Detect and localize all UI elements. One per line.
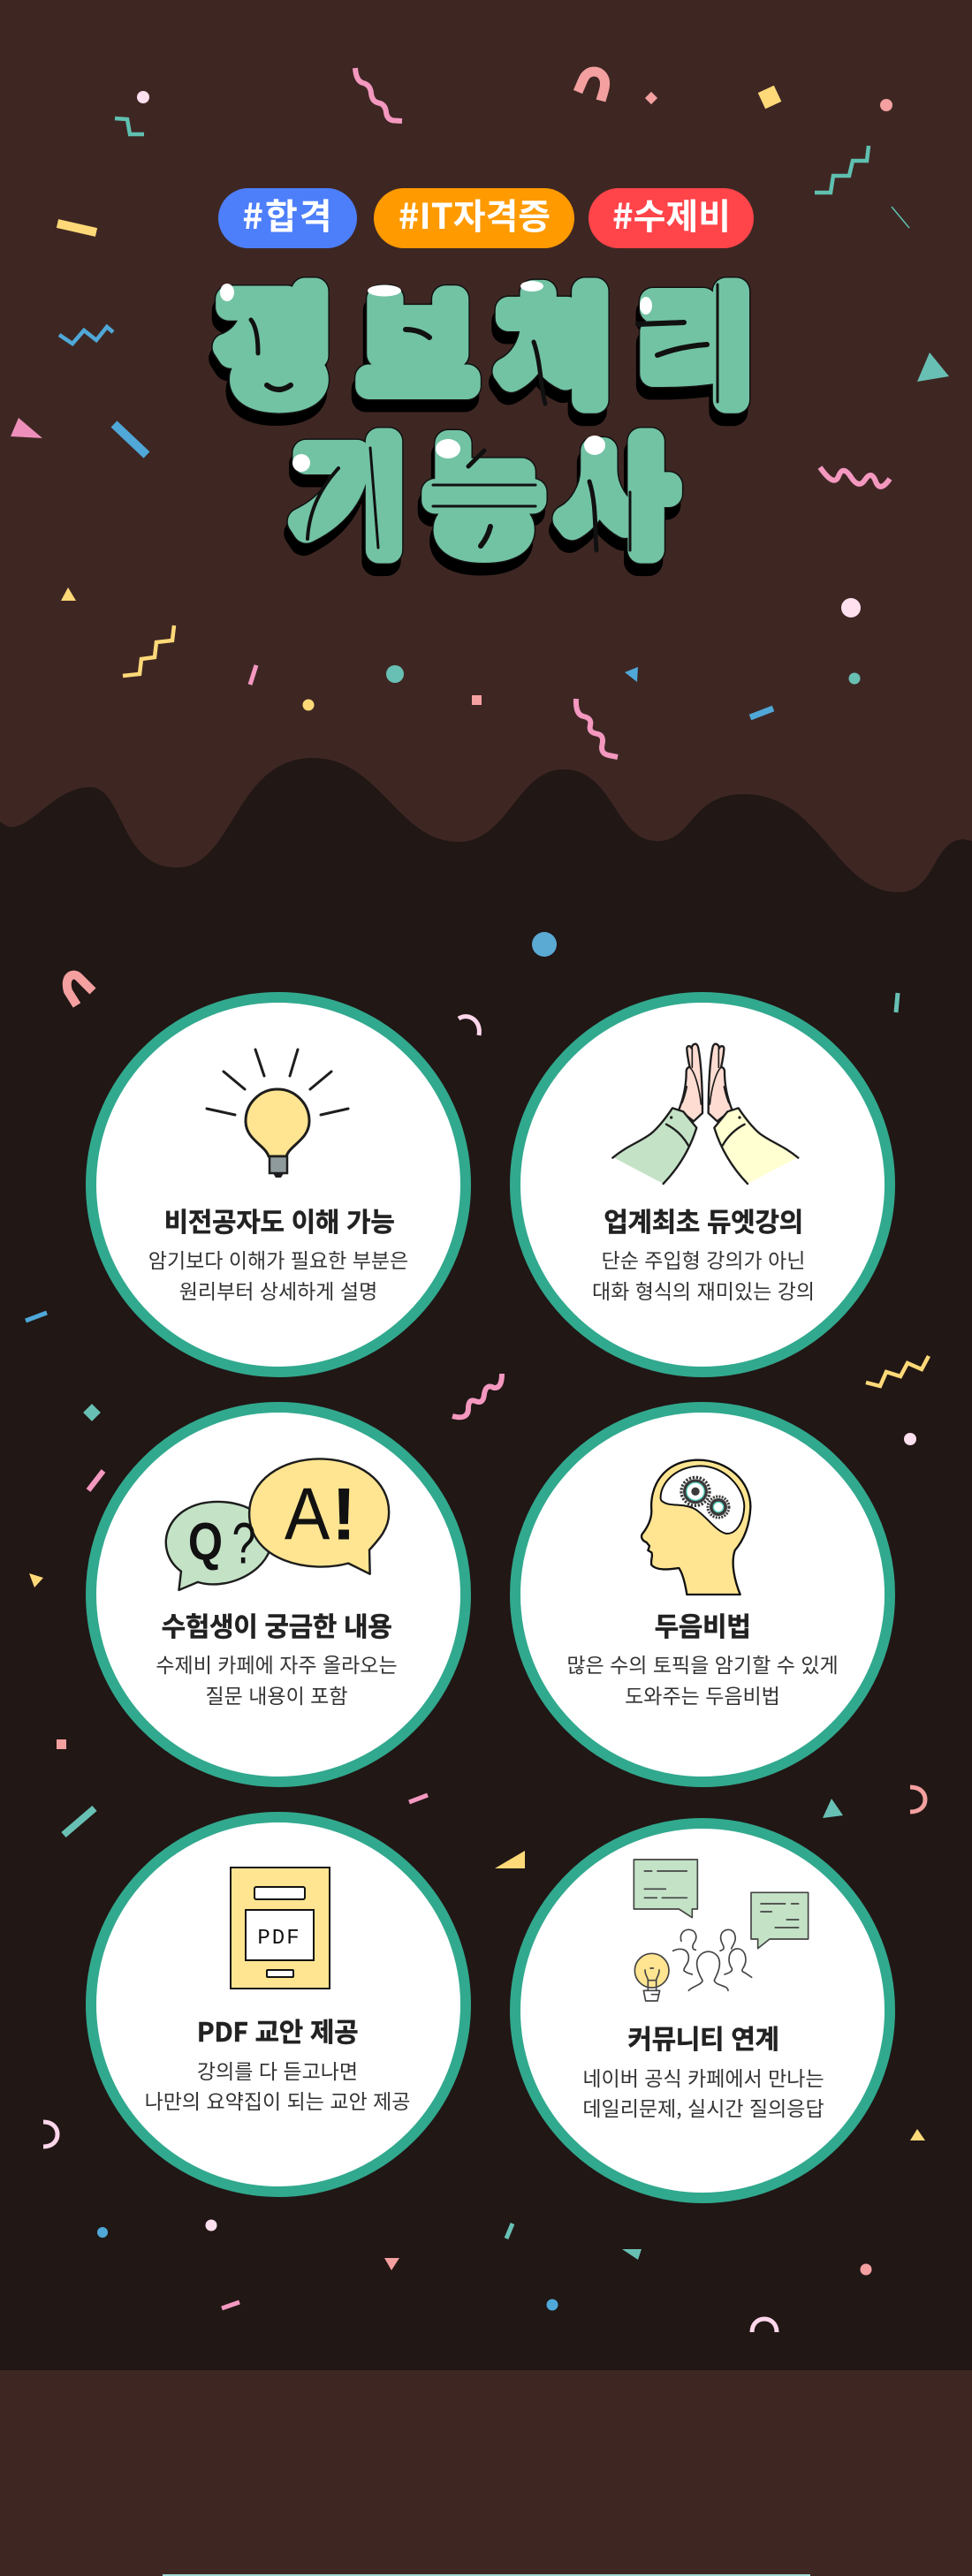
icon: Q and A speech bubbles: ? xyxy=(232,1511,255,1576)
top brown background with wave xyxy=(0,0,972,892)
icon: high five hands xyxy=(612,1044,798,1184)
confetti: top section xyxy=(11,68,949,757)
icon: Q and A speech bubbles: ! xyxy=(331,1473,356,1555)
text block xyxy=(566,1648,839,1709)
title: 정보처리 xyxy=(216,263,749,437)
title: 정보처리 xyxy=(219,252,752,426)
text block: 나만의 요약집이 되는 교안 제공 xyxy=(145,2085,410,2115)
title: 정보처리 xyxy=(219,252,752,426)
text block: 네이버 공식 카페에서 만나는 xyxy=(582,2062,824,2092)
text block xyxy=(592,1244,815,1305)
text block: 수제비 카페에 자주 올라오는 xyxy=(156,1648,398,1678)
pill: 수제비: #수제비 xyxy=(612,188,731,239)
bottom brown band xyxy=(0,2370,972,2576)
heading: 업계최초 듀엣강의 xyxy=(604,1201,803,1239)
text block: 강의를 다 듣고나면 xyxy=(197,2055,358,2085)
pill: IT자격증: #IT자격증 xyxy=(399,188,551,239)
panel: 커뮤니티 연계 xyxy=(515,1823,890,2198)
title: 기능사 xyxy=(293,402,672,576)
title: 기능사 xyxy=(291,413,670,587)
bottom line xyxy=(163,2574,810,2576)
icon: PDF document: PDF xyxy=(257,1927,301,1951)
heading: 커뮤니티 연계 xyxy=(627,2018,779,2057)
heading: 두음비법 xyxy=(655,1605,750,1644)
title: 기능사 xyxy=(293,402,672,576)
text block xyxy=(156,1648,398,1709)
text block: 많은 수의 토픽을 암기할 수 있게 xyxy=(566,1648,839,1678)
text block xyxy=(582,2062,824,2122)
tag pills xyxy=(218,188,754,248)
text block: 암기보다 이해가 필요한 부분은 xyxy=(148,1244,408,1274)
title xyxy=(216,252,752,587)
heading: PDF 교안 제공 xyxy=(197,2011,358,2049)
text block: 질문 내용이 포함 xyxy=(205,1679,348,1709)
text block: 도와주는 두음비법 xyxy=(625,1679,780,1709)
confetti: middle and lower section xyxy=(26,932,929,2332)
text block xyxy=(148,1244,408,1305)
text block: 원리부터 상세하게 설명 xyxy=(179,1275,377,1305)
icon: Q and A speech bubbles: Q xyxy=(188,1512,223,1571)
icon: PDF document xyxy=(231,1868,330,1989)
pill: 수제비 xyxy=(589,188,754,248)
text block: 대화 형식의 재미있는 강의 xyxy=(592,1275,815,1305)
heading: 비전공자도 이해 가능 xyxy=(164,1201,394,1239)
pill: IT자격증 xyxy=(374,188,574,248)
text block: 단순 주입형 강의가 아닌 xyxy=(602,1244,805,1274)
panel: 두음비법 xyxy=(515,1407,890,1782)
text block: 데일리문제, 실시간 질의응답 xyxy=(582,2092,824,2122)
pill: 합격 xyxy=(218,188,357,248)
text block xyxy=(145,2055,410,2115)
pill: 합격: #합격 xyxy=(242,188,334,239)
panel: 업계최초 듀엣강의 xyxy=(515,997,890,1372)
panel: PDF 교안 제공 xyxy=(91,1817,466,2192)
icon: light bulb xyxy=(207,1049,348,1178)
icon: Q and A speech bubbles: A xyxy=(285,1473,330,1555)
icon: community chat xyxy=(634,1860,809,2001)
icon: Q and A speech bubbles xyxy=(166,1458,389,1590)
heading: 수험생이 궁금한 내용 xyxy=(162,1605,391,1644)
panel: 비전공자도 이해 가능 xyxy=(91,997,466,1372)
panel: 수험생이 궁금한 내용 xyxy=(91,1407,466,1782)
icon: head with gears xyxy=(642,1460,750,1595)
